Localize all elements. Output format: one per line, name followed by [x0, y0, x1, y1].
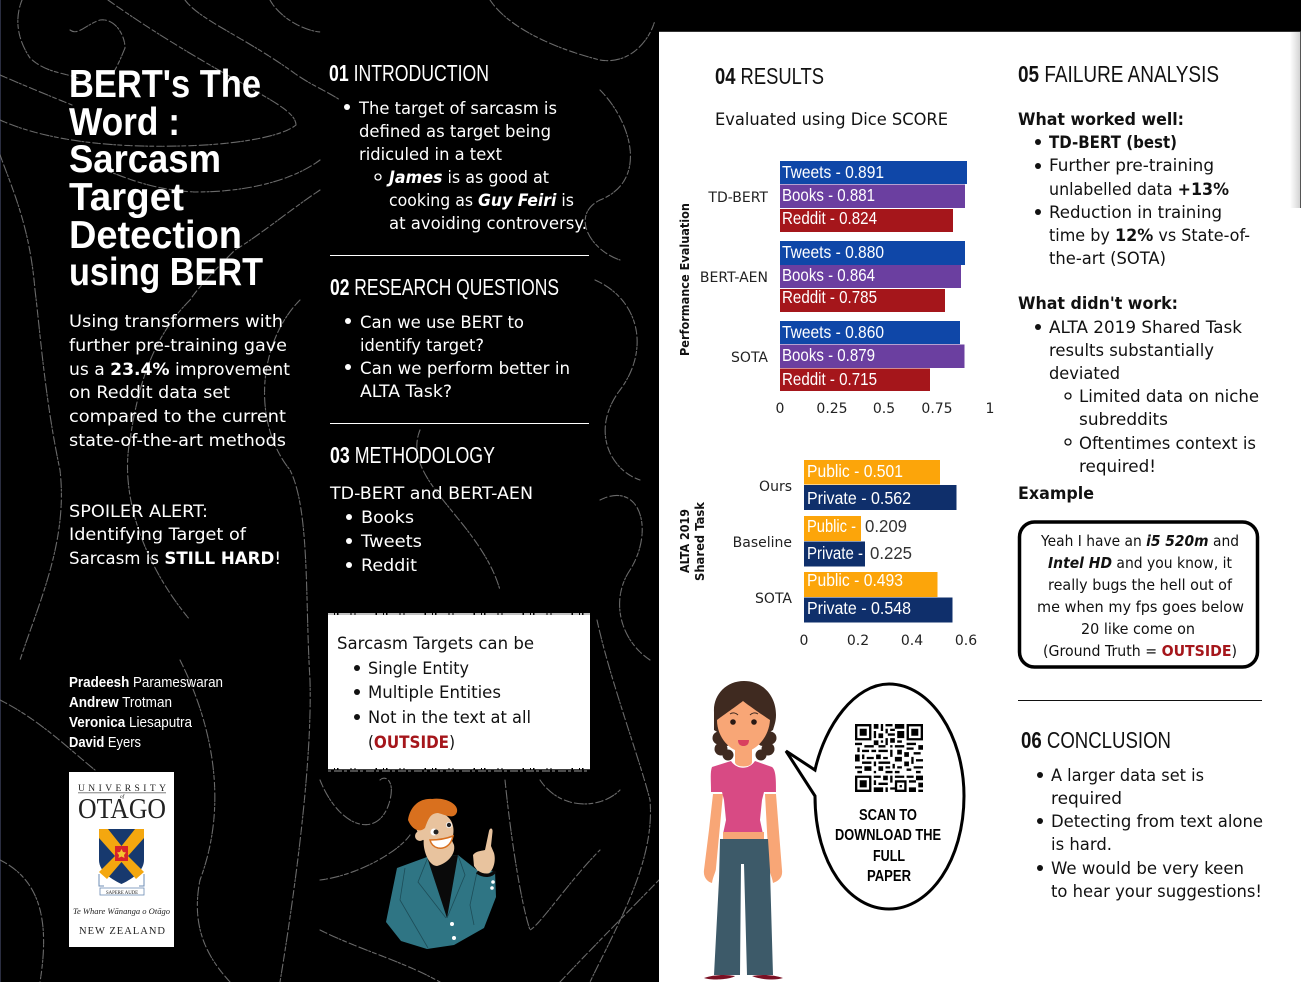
bar chart: performance evaluation	[677, 161, 994, 417]
bar chart: ALTA 2019 shared task: Public -	[807, 516, 856, 536]
bar chart: ALTA 2019 shared task: 0.225	[870, 543, 912, 563]
text block: summary: state-of-the-art methods	[69, 431, 286, 451]
text block: what didn't work: Example	[1018, 484, 1094, 504]
text block: summary: further pre-training gave	[69, 336, 287, 356]
text block: spoiler alert: Identifying Target of	[69, 525, 247, 545]
bar chart: ALTA 2019 shared task: Private -	[807, 543, 863, 563]
bar chart: performance evaluation: Books - 0.881	[782, 185, 875, 205]
bar chart: performance evaluation: 1	[986, 401, 994, 417]
bar chart: performance evaluation: 0.5	[873, 401, 895, 417]
logo: University of Otago: of	[120, 793, 126, 800]
text block: research questions list: identify target?	[360, 336, 484, 356]
text block: scan to download: FULL	[873, 848, 905, 865]
bar chart: ALTA 2019 shared task: 0	[800, 633, 808, 649]
text block: authors: Pradeesh Parameswaran	[69, 675, 223, 691]
callout: example sentence	[1020, 522, 1258, 667]
text block: what didn't work: results substantially	[1049, 341, 1214, 361]
text block: summary: Using transformers with	[69, 312, 283, 332]
bar chart: performance evaluation: SOTA	[731, 350, 768, 366]
bar chart: performance evaluation: 0.75	[921, 401, 953, 417]
axis title: ALTA 2019 shared task: ALTA 2019	[677, 509, 692, 573]
text block: summary: on Reddit data set	[69, 383, 230, 403]
text block: authors	[69, 675, 223, 751]
bar chart: performance evaluation: Tweets - 0.891	[782, 162, 884, 182]
text block: what didn't work: required!	[1079, 457, 1156, 477]
axis title: performance evaluation: Performance Evaluation	[677, 203, 692, 356]
text block: what worked well: Further pre-training	[1049, 156, 1214, 176]
bar chart: performance evaluation: Reddit - 0.785	[782, 287, 877, 307]
text block: methodology list: Reddit	[361, 556, 417, 576]
text block: scan to download: SCAN TO	[859, 807, 917, 824]
text block: scan to download: DOWNLOAD THE	[835, 827, 941, 844]
bar chart: ALTA 2019 shared task: Baseline	[733, 535, 792, 551]
callout: example sentence: Intel HD and you know, it	[1048, 554, 1232, 572]
text block: what didn't work: subreddits	[1079, 410, 1168, 430]
bar chart: performance evaluation: Reddit - 0.715	[782, 369, 877, 389]
text block: what didn't work: Oftentimes context is	[1079, 434, 1256, 454]
text block: research questions list	[345, 313, 570, 402]
illustration: pointing man	[386, 799, 496, 949]
text block: methodology list: Books	[361, 508, 414, 528]
text block: spoiler alert: Sarcasm is STILL HARD!	[69, 549, 281, 569]
panel: sarcasm targets: Multiple Entities	[368, 683, 501, 703]
text block: methodology list	[329, 484, 533, 576]
bar chart: ALTA 2019 shared task: 0.6	[955, 633, 977, 649]
text block: what didn't work: Limited data on niche	[1079, 387, 1259, 407]
bar chart: ALTA 2019 shared task: Public - 0.501	[807, 461, 903, 481]
QR code	[855, 724, 923, 792]
text block: introduction list: at avoiding controversy.	[389, 214, 587, 234]
text block: conclusion list: is hard.	[1051, 835, 1112, 855]
text block: scan to download	[835, 807, 941, 885]
bar chart: performance evaluation: Tweets - 0.860	[782, 322, 884, 342]
text block: what didn't work	[1018, 294, 1259, 504]
title	[69, 63, 263, 294]
text block: introduction list: James is as good at	[386, 168, 549, 188]
panel: sarcasm targets: Single Entity	[368, 659, 469, 679]
speech bubble: QR code	[786, 684, 964, 909]
text block: what worked well: What worked well:	[1018, 110, 1184, 130]
bar chart: performance evaluation: Reddit - 0.824	[782, 208, 877, 228]
text block: spoiler alert	[69, 502, 281, 569]
panel: sarcasm targets: Not in the text at all	[368, 708, 531, 728]
text block: introduction list: defined as target being	[359, 122, 551, 142]
text block: what didn't work: What didn't work:	[1018, 294, 1178, 314]
logo: University of Otago: NEW ZEALAND	[79, 926, 165, 937]
heading: 05 failure analysis: 05 FAILURE ANALYSIS	[1018, 61, 1219, 87]
bar chart: performance evaluation: 0	[776, 401, 784, 417]
heading: 06 conclusion: 06 CONCLUSION	[1021, 727, 1171, 753]
panel: sarcasm targets	[328, 614, 590, 771]
bar chart: ALTA 2019 shared task: 0.4	[901, 633, 923, 649]
axis title: ALTA 2019 shared task: Shared Task	[692, 501, 707, 581]
bar chart: ALTA 2019 shared task: Ours	[759, 479, 792, 495]
text block: introduction list: The target of sarcasm is	[358, 99, 557, 119]
illustration: woman	[704, 681, 783, 979]
text block: spoiler alert: SPOILER ALERT:	[69, 502, 208, 522]
text block: authors: David Eyers	[69, 735, 141, 751]
text block: introduction list: cooking as Guy Feiri is	[389, 191, 574, 211]
bar chart: performance evaluation: Books - 0.879	[782, 345, 875, 365]
bar chart: ALTA 2019 shared task: Private - 0.562	[807, 488, 911, 508]
logo: University of Otago: UNIVERSITY	[78, 784, 166, 794]
title: using BERT	[69, 251, 263, 294]
text block: what worked well: time by 12% vs State-of-	[1049, 226, 1250, 246]
bar chart: ALTA 2019 shared task: 0.2	[847, 633, 869, 649]
text block: conclusion list: to hear your suggestions!	[1051, 882, 1262, 902]
callout: example sentence: really bugs the hell out of	[1048, 576, 1233, 594]
text block: introduction list	[344, 99, 587, 234]
text block: authors: Veronica Liesaputra	[69, 715, 193, 731]
text block: scan to download: PAPER	[867, 868, 911, 885]
bar chart: ALTA 2019 shared task: 0.209	[865, 516, 907, 536]
text block: methodology list: Tweets	[360, 532, 422, 552]
heading: 02 research questions: 02 RESEARCH QUESTIONS	[330, 274, 559, 300]
panel: sarcasm targets: (OUTSIDE)	[368, 733, 455, 753]
text block: conclusion list: We would be very keen	[1051, 859, 1244, 879]
logo: University of Otago: SAPERE AUDE	[106, 891, 138, 896]
logo: University of Otago: Te Whare Wānanga o Otāgo	[73, 906, 171, 916]
text block: what didn't work: ALTA 2019 Shared Task	[1049, 318, 1242, 338]
bar chart: performance evaluation: TD-BERT	[707, 190, 768, 206]
text block: summary: compared to the current	[69, 407, 286, 427]
title: Word :	[69, 101, 180, 144]
text block: authors: Andrew Trotman	[69, 695, 172, 711]
text block: research questions list: Can we perform better in	[360, 359, 570, 379]
text block: what worked well: Reduction in training	[1049, 203, 1222, 223]
callout: example sentence: 20 like come on	[1081, 620, 1195, 638]
axis title: ALTA 2019 shared task	[677, 501, 707, 581]
bar chart: performance evaluation: Tweets - 0.880	[782, 242, 884, 262]
text block: what didn't work: deviated	[1049, 364, 1120, 384]
text block: what worked well: TD-BERT (best)	[1049, 133, 1177, 153]
text block: introduction list: ridiculed in a text	[359, 145, 502, 165]
logo: University of Otago: OTAGO	[78, 794, 166, 825]
bar chart: ALTA 2019 shared task	[677, 460, 977, 649]
text block: conclusion list: Detecting from text alone	[1051, 812, 1263, 832]
title: Sarcasm	[69, 138, 221, 181]
text block: conclusion list: A larger data set is	[1051, 766, 1204, 786]
text block: results subtitle: Evaluated using Dice SCORE	[715, 110, 948, 130]
text block: summary: us a 23.4% improvement	[69, 360, 290, 380]
panel: sarcasm targets: Sarcasm Targets can be	[337, 634, 534, 654]
title: BERT's The	[69, 63, 261, 106]
callout: example sentence: me when my fps goes below	[1037, 598, 1244, 616]
heading: 03 methodology: 03 METHODOLOGY	[330, 442, 495, 468]
text block: methodology list: TD-BERT and BERT-AEN	[329, 484, 533, 504]
text block: what worked well: unlabelled data +13%	[1049, 180, 1229, 200]
bar chart: performance evaluation: Books - 0.864	[782, 265, 875, 285]
callout: example sentence: (Ground Truth = OUTSIDE)	[1043, 642, 1237, 660]
bar chart: ALTA 2019 shared task: SOTA	[755, 591, 792, 607]
bar chart: ALTA 2019 shared task: Private - 0.548	[807, 598, 911, 618]
title: Detection	[69, 214, 242, 257]
text block: what worked well	[1018, 110, 1250, 269]
text block: conclusion list	[1037, 766, 1263, 902]
callout: example sentence: Yeah I have an i5 520m and	[1040, 532, 1239, 550]
text block: conclusion list: required	[1051, 789, 1122, 809]
bar chart: performance evaluation: BERT-AEN	[700, 270, 768, 286]
heading: 04 results: 04 RESULTS	[715, 63, 824, 89]
text block: research questions list: Can we use BERT to	[360, 313, 524, 333]
panel: results background	[659, 31, 1301, 982]
text block: what worked well: the-art (SOTA)	[1049, 249, 1166, 269]
text block: research questions list: ALTA Task?	[360, 382, 452, 402]
title: Target	[69, 176, 184, 219]
heading: 01 introduction: 01 INTRODUCTION	[329, 60, 489, 86]
logo: University of Otago	[69, 772, 174, 947]
bar chart: performance evaluation: 0.25	[816, 401, 848, 417]
text block: summary	[69, 312, 290, 451]
bar chart: ALTA 2019 shared task: Public - 0.493	[807, 570, 903, 590]
